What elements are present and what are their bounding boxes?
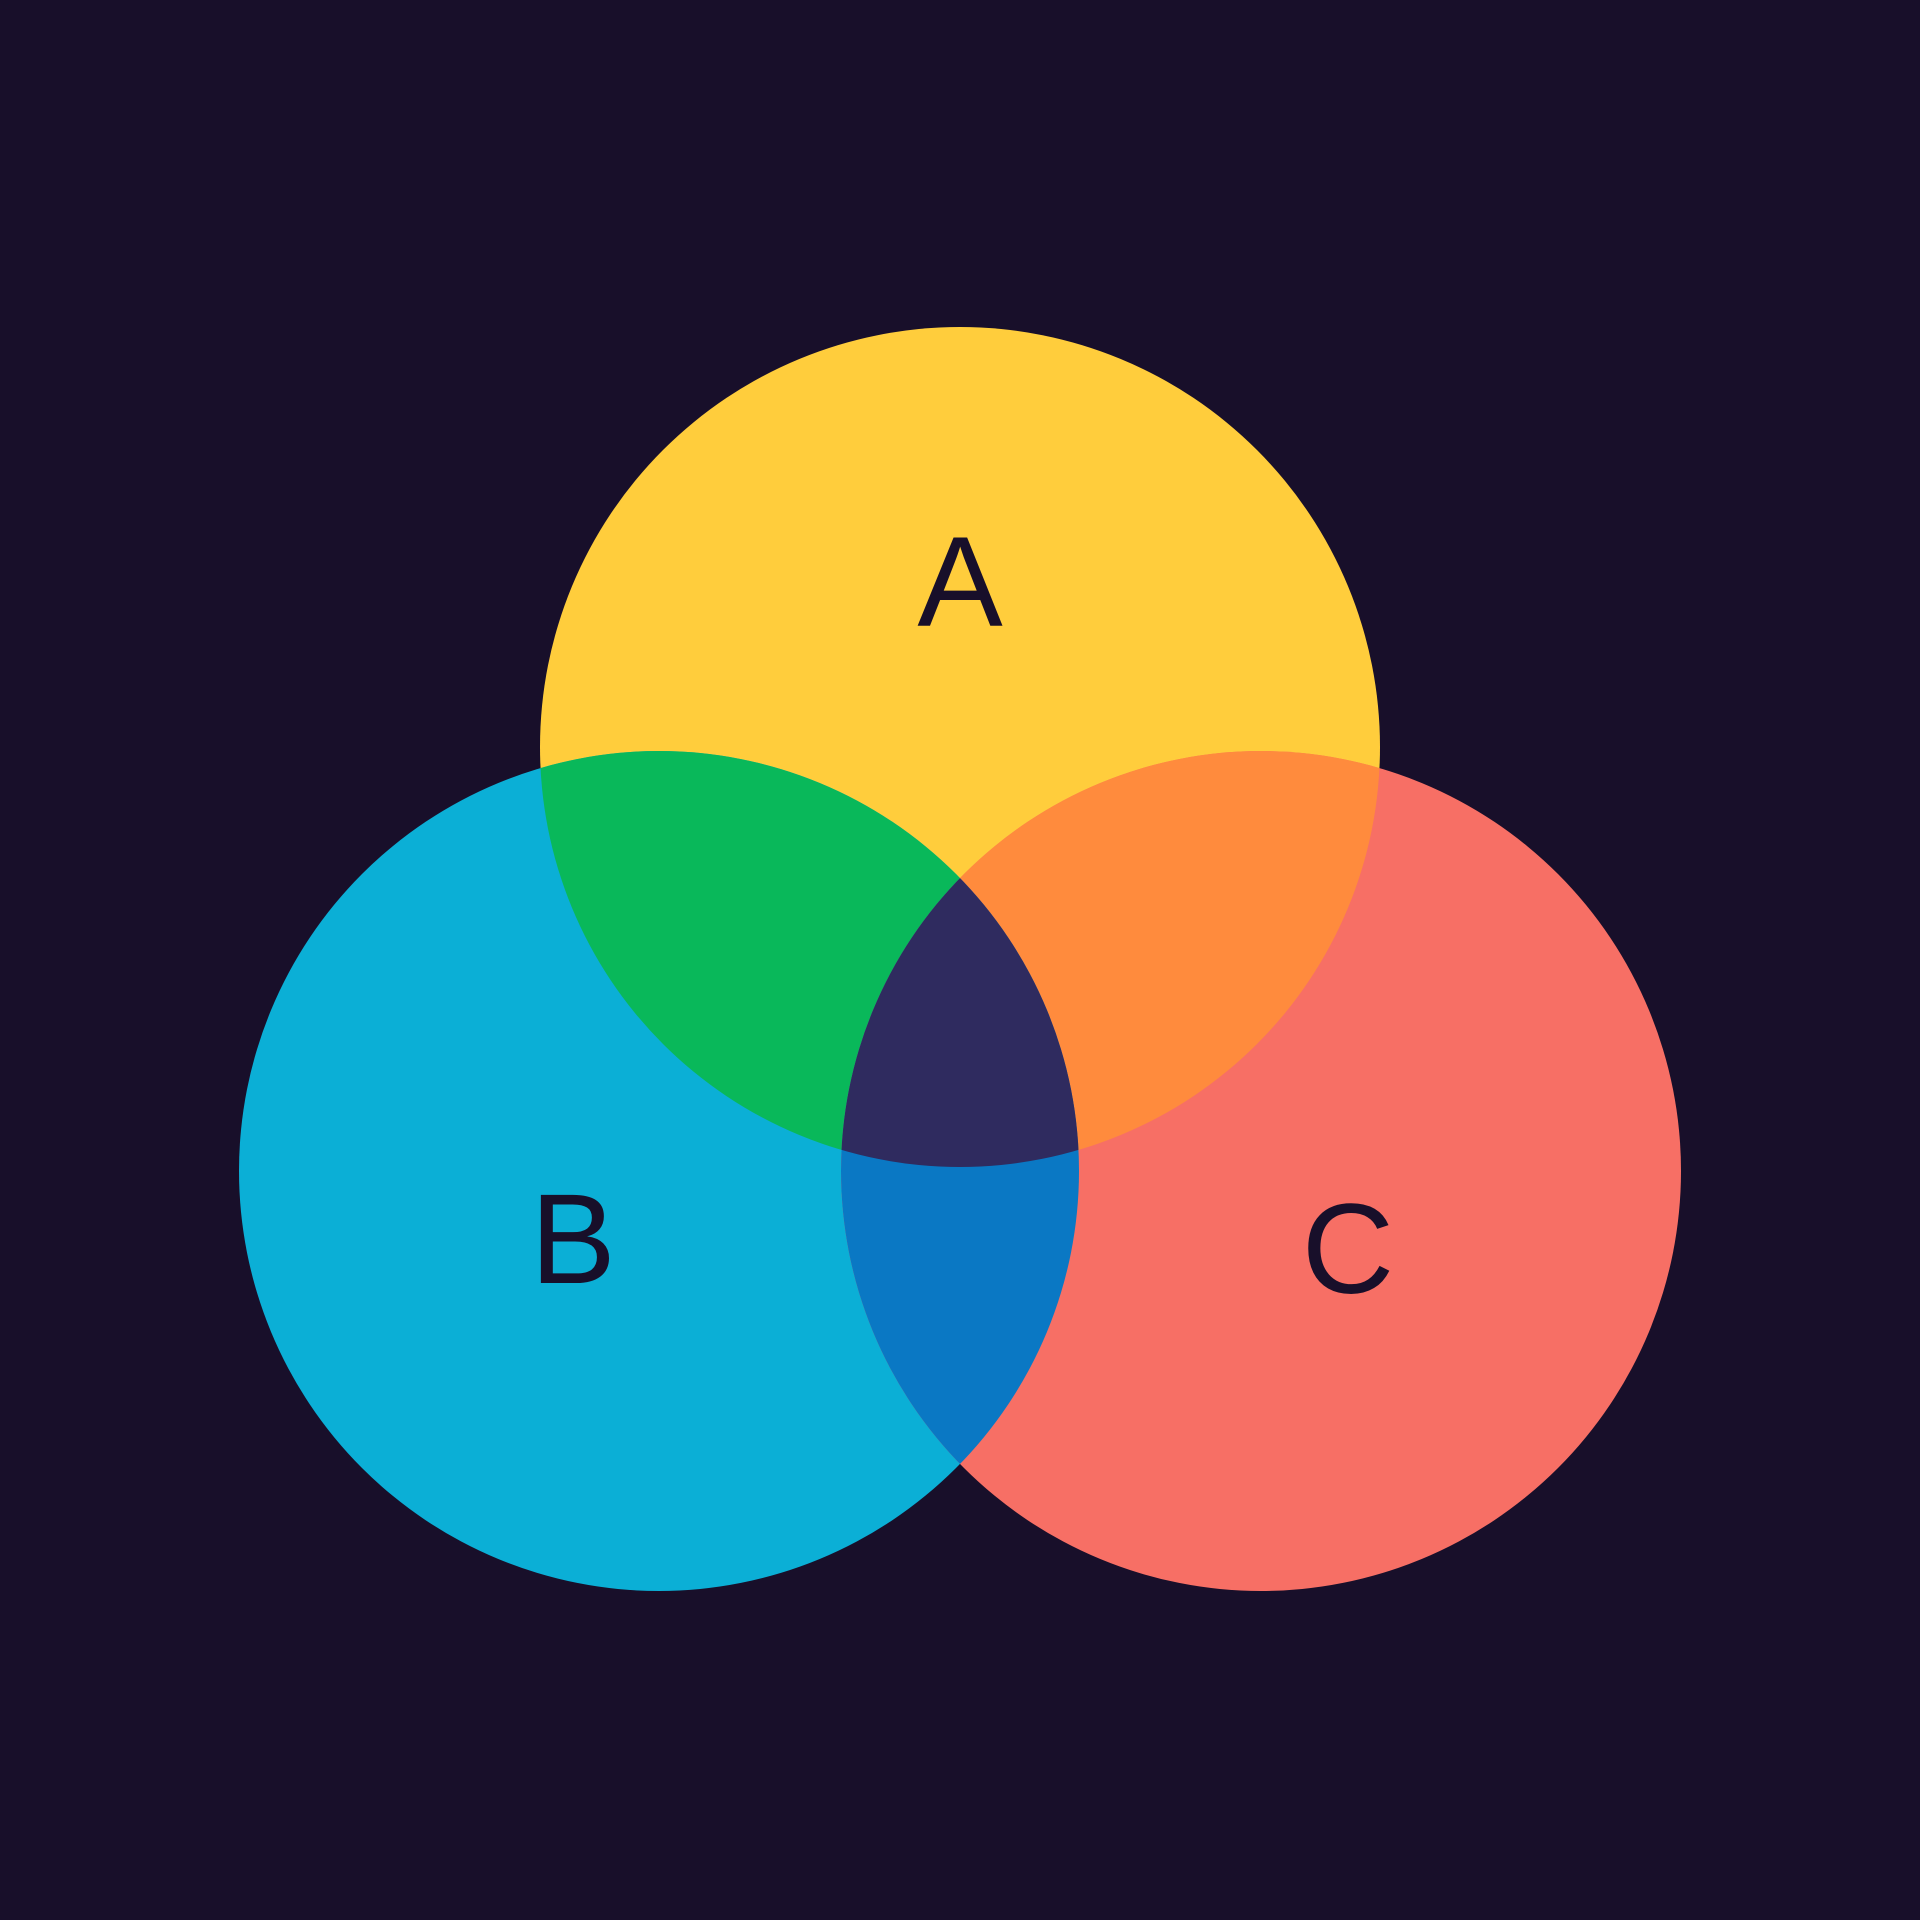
- overlap A∩B∩C: [842, 878, 1078, 1167]
- circle A: [540, 327, 1380, 1167]
- venn diagram: [239, 327, 1681, 1591]
- label A: A: [917, 511, 1003, 654]
- overlap A∩C: [842, 751, 1380, 1150]
- overlap B∩C: [841, 878, 1079, 1464]
- overlap A∩B: [540, 751, 960, 1150]
- label C: C: [1302, 1178, 1394, 1321]
- circle B: [239, 751, 1079, 1591]
- label B: B: [530, 1168, 616, 1311]
- circle C: [841, 751, 1681, 1591]
